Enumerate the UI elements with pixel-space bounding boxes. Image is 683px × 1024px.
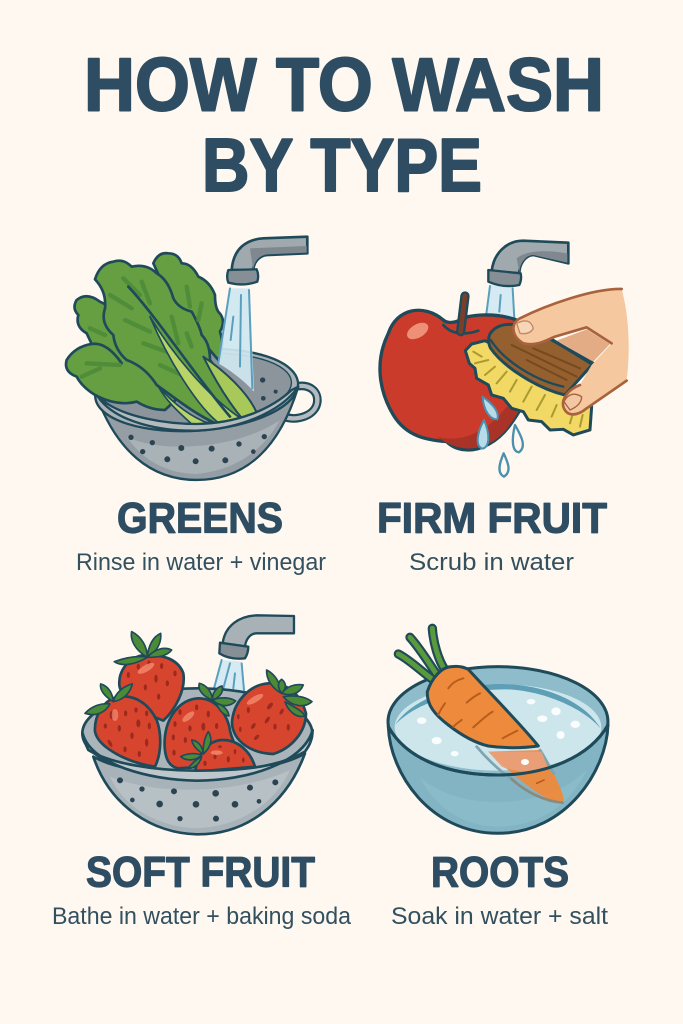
text: firm fruit method: Scrub in water: [409, 549, 574, 576]
drops on apple: [483, 397, 498, 419]
water stream: [485, 285, 515, 325]
strawberry: right: [232, 670, 312, 754]
hand: [513, 289, 629, 414]
heading: firm fruit: FIRM FRUIT: [377, 494, 607, 542]
left lettuce leaf: [66, 296, 190, 410]
icon: apple scrubbed with brush: [380, 241, 629, 477]
strawberry: left: [85, 684, 160, 767]
water stream: [213, 660, 245, 693]
panel: greens: [66, 237, 326, 576]
heading: soft fruit: SOFT FRUIT: [86, 848, 315, 896]
stem: [461, 296, 465, 332]
heading: greens: GREENS: [117, 494, 283, 542]
carrot tops: [398, 628, 445, 680]
tap: [492, 241, 568, 273]
panel: firm fruit: [377, 241, 629, 576]
text: greens method: Rinse in water + vinegar: [76, 549, 326, 576]
bowl back: [388, 667, 608, 777]
icon: carrot soaking in bowl: [388, 628, 608, 833]
water surface: [395, 684, 601, 771]
bowl body: [388, 725, 608, 833]
text: soft fruit method: Bathe in water + baking soda: [52, 903, 352, 930]
colander front rim: [83, 730, 313, 781]
centre lettuce leaf: [95, 261, 253, 424]
water stream: [218, 288, 254, 392]
title: [84, 42, 604, 207]
front rim: [98, 387, 298, 431]
heading: roots: ROOTS: [431, 848, 569, 896]
panel: roots: [388, 628, 608, 930]
title: BY TYPE: [202, 123, 482, 207]
text: roots method: Soak in water + salt: [391, 903, 608, 930]
tap: [232, 237, 307, 271]
lettuce stems: [150, 317, 243, 424]
falling drops: [513, 425, 523, 452]
icon: colander with lettuce under tap: [66, 237, 317, 480]
icon: colander of strawberries under tap: [82, 615, 313, 834]
title: HOW TO WASH: [84, 42, 604, 126]
strawberry: top: [114, 632, 184, 721]
brush bristles: [465, 341, 592, 435]
tap: [223, 615, 294, 648]
back lettuce leaf: [153, 253, 223, 360]
carrot body: [427, 666, 538, 748]
bowl front rim: [388, 725, 608, 775]
bubbles: [417, 699, 580, 756]
colander: [82, 688, 312, 778]
strawberry: front: [181, 732, 255, 772]
strawberry: centre: [165, 683, 247, 768]
carrot submerged: [488, 750, 564, 803]
panel: soft fruit: [52, 615, 352, 930]
apple: [380, 310, 520, 450]
brush wood base: [489, 324, 593, 395]
